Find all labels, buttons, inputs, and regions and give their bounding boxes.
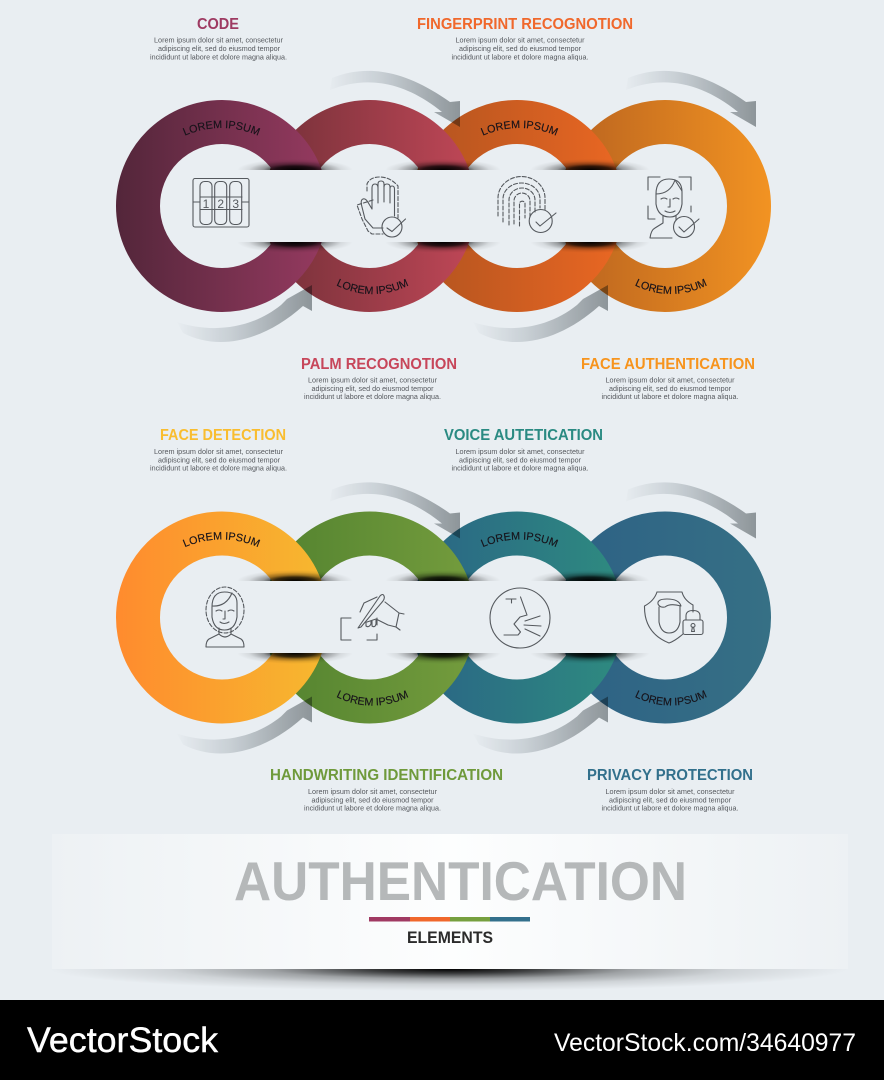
footer bar: [0, 1000, 884, 1080]
watermark brand: VectorStock: [27, 1021, 219, 1060]
heading: privacy protection: Lorem ipsum dolor sit amet, consectetur: [606, 789, 735, 796]
heading: face detection: Lorem ipsum dolor sit amet, consectetur: [154, 449, 284, 456]
heading: face authentication: adipiscing elit, sed do eiusmod tempor: [609, 386, 732, 393]
ring: code: [138, 122, 306, 290]
heading: privacy protection: adipiscing elit, sed do eiusmod tempor: [609, 797, 732, 804]
heading: voice autetication: adipiscing elit, sed do eiusmod tempor: [459, 457, 582, 464]
heading: palm recognotion: adipiscing elit, sed do eiusmod tempor: [312, 386, 434, 393]
heading: face detection: adipiscing elit, sed do eiusmod tempor: [158, 457, 281, 464]
ring labels: LOREM IPSUM: [480, 120, 558, 136]
heading: palm recognotion: [301, 356, 457, 401]
heading: fingerprint recognotion: [417, 16, 633, 61]
ring labels: LOREM IPSUM: [336, 690, 408, 706]
heading: handwriting identification: HANDWRITING IDENTIFICATION: [270, 767, 503, 784]
title: AUTHENTICATION: [234, 850, 687, 912]
arrow: code to palm: [177, 285, 312, 342]
heading: face detection: incididunt ut labore et dolore magna aliqua.: [150, 466, 287, 472]
band shadows: [237, 159, 650, 253]
heading: face authentication: Lorem ipsum dolor sit amet, consectetur: [606, 378, 735, 384]
heading: palm recognotion: incididunt ut labore et dolore magna aliqua.: [304, 394, 441, 401]
ring: handwriting identification: [286, 534, 454, 702]
ring labels: [182, 532, 707, 706]
icon: face with check: [648, 177, 699, 238]
heading: handwriting identification: adipiscing elit, sed do eiusmod tempor: [312, 797, 434, 804]
icon: palm with check: [357, 177, 406, 237]
heading: code: incididunt ut labore et dolore magna aliqua.: [150, 54, 287, 61]
arrow: fingerprint to face: [473, 285, 608, 342]
heading: privacy protection: [587, 767, 753, 812]
watermark url: VectorStock.com/34640977: [554, 1029, 856, 1057]
heading: palm recognotion: Lorem ipsum dolor sit amet, consectetur: [308, 378, 438, 384]
ring: voice autetication: [433, 534, 601, 702]
chain diagram: row 2: [116, 482, 771, 754]
heading: handwriting identification: Lorem ipsum dolor sit amet, consectetur: [308, 789, 438, 796]
subtitle: ELEMENTS: [407, 929, 493, 947]
band shadows: [237, 570, 650, 664]
icon: code: 1: [203, 197, 210, 211]
arrow: handwriting to voice: [330, 482, 460, 538]
icon: privacy shield with lock: [644, 592, 703, 643]
ring labels: [182, 120, 707, 294]
icon: voice: [490, 588, 550, 648]
icon: fingerprint with check: [498, 177, 556, 232]
arrow: palm to fingerprint: [330, 71, 460, 127]
color bar: [369, 917, 530, 922]
arrow: voice to privacy: [473, 696, 608, 754]
ring labels: LOREM IPSUM: [336, 278, 408, 294]
icon: code: 3: [232, 197, 239, 211]
icon: face detection: [206, 587, 244, 647]
heading: privacy protection: PRIVACY PROTECTION: [587, 767, 753, 784]
ring: face detection: [138, 534, 306, 702]
heading: code: Lorem ipsum dolor sit amet, consectetur: [154, 38, 284, 45]
chain diagram: row 1: [116, 71, 771, 342]
ring labels: LOREM IPSUM: [182, 532, 260, 547]
ring labels: LOREM IPSUM: [480, 532, 558, 547]
icon: handwriting: [341, 594, 404, 640]
ring labels: LOREM IPSUM: [635, 278, 707, 294]
heading: face authentication: [581, 356, 755, 401]
heading: fingerprint recognotion: Lorem ipsum dolor sit amet, consectetur: [456, 38, 585, 45]
heading: face authentication: incididunt ut labore et dolore magna aliqua.: [602, 394, 739, 401]
heading: code: adipiscing elit, sed do eiusmod tempor: [158, 46, 281, 53]
heading: face detection: [150, 427, 287, 472]
heading: voice autetication: VOICE AUTETICATION: [444, 427, 603, 444]
title panel shadow: [49, 947, 849, 991]
ring labels: LOREM IPSUM: [635, 690, 707, 706]
ring: privacy protection: [581, 534, 749, 702]
heading: code: CODE: [197, 16, 239, 33]
ring: fingerprint recognotion: [433, 122, 601, 290]
heading: voice autetication: [444, 427, 603, 472]
heading: code: [150, 16, 287, 61]
heading: face authentication: FACE AUTHENTICATION: [581, 356, 755, 373]
ring labels: LOREM IPSUM: [182, 120, 260, 136]
heading: voice autetication: Lorem ipsum dolor sit amet, consectetur: [456, 449, 585, 456]
ring: face authentication: [581, 122, 749, 290]
icon: code: 2: [217, 197, 224, 211]
heading: face detection: FACE DETECTION: [160, 427, 286, 444]
arrow: privacy onward: [626, 482, 756, 538]
arrow: face detection to handwriting: [177, 696, 312, 754]
heading: fingerprint recognotion: adipiscing elit, sed do eiusmod tempor: [459, 46, 582, 53]
icon: code: [193, 178, 249, 227]
ring: palm recognotion: [286, 122, 454, 290]
heading: handwriting identification: [270, 767, 503, 812]
heading: fingerprint recognotion: FINGERPRINT RECOGNOTION: [417, 16, 633, 33]
band: [222, 170, 667, 242]
arrow: face onward: [626, 71, 756, 127]
title panel: [52, 834, 848, 969]
heading: fingerprint recognotion: incididunt ut labore et dolore magna aliqua.: [452, 54, 589, 61]
heading: palm recognotion: PALM RECOGNOTION: [301, 356, 457, 373]
heading: handwriting identification: incididunt ut labore et dolore magna aliqua.: [304, 806, 441, 812]
band: [222, 581, 667, 653]
heading: privacy protection: incididunt ut labore et dolore magna aliqua.: [602, 806, 739, 812]
heading: voice autetication: incididunt ut labore et dolore magna aliqua.: [452, 466, 589, 472]
